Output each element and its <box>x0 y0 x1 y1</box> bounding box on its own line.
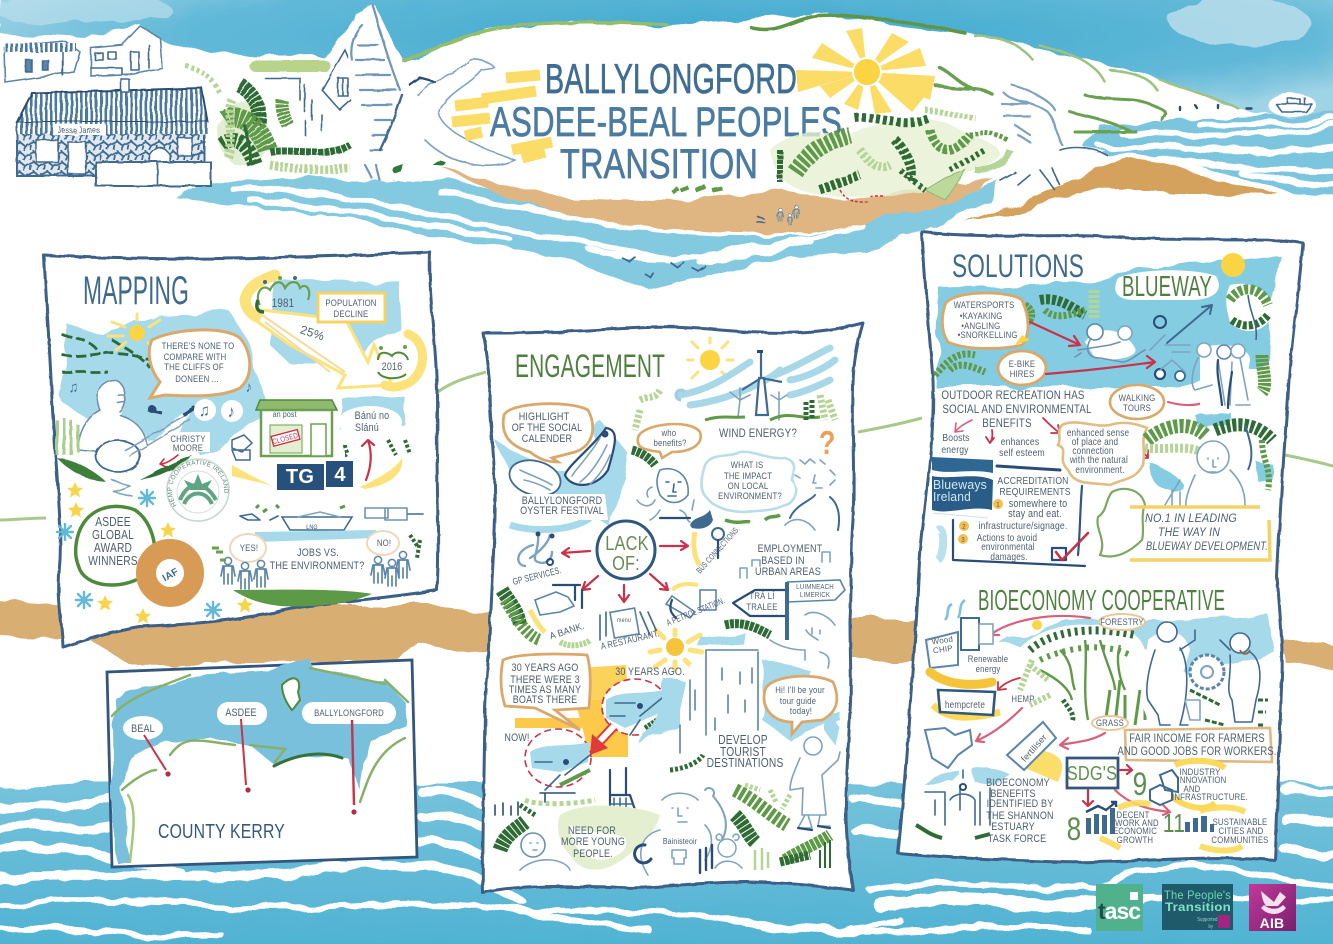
illustration: 30 years ago circle <box>602 666 685 735</box>
text: outdoor recreation benefits: OUTDOOR RECREATION HAS <box>941 389 1085 402</box>
box: accreditation requirements: ACCREDITATION <box>997 475 1069 487</box>
illustration: man among trees <box>1145 412 1273 507</box>
background: sky wash <box>0 0 1333 118</box>
goal 11: sustainable cities: COMMUNITIES <box>1211 834 1269 845</box>
text: outdoor recreation benefits: BENEFITS <box>982 417 1032 430</box>
box: accreditation requirements: damages. <box>990 551 1028 562</box>
label: Ballylongford Oyster Festival: BALLYLONGFORD <box>522 495 602 507</box>
logo: TG4: 4 <box>334 464 346 486</box>
panel: Solutions <box>898 232 1303 862</box>
logo: Blueways Ireland flag <box>932 457 993 560</box>
map: estuary water <box>112 660 408 860</box>
label: employment based in urban areas: BASED IN <box>761 555 805 567</box>
icon: wood chip and boiler <box>926 600 993 684</box>
pin: Beal <box>123 716 171 777</box>
box: accreditation requirements: infrastructure/signage. <box>979 520 1067 532</box>
pin: Beal: BEAL <box>131 723 155 735</box>
callout: enhanced sense of place: environment. <box>1075 464 1125 475</box>
label: boosts energy <box>941 432 970 456</box>
icon: GP services stethoscope <box>512 532 563 588</box>
icon: shirt <box>925 728 972 768</box>
logo: The People's Transition <box>1162 884 1233 930</box>
logo: AIB <box>1249 884 1296 931</box>
icon: tour guide woman <box>790 715 842 830</box>
icon: fertiliser bag: fertiliser <box>1019 732 1049 764</box>
icon: farmers with gear <box>1140 622 1268 725</box>
callout: tour guide greeting: today! <box>790 705 812 716</box>
icon: sun <box>1221 253 1245 277</box>
text: bioeconomy benefits: IDENTIFIED BY <box>987 798 1053 810</box>
callout: 30 years ago quote: THERE WERE 3 <box>510 674 580 686</box>
icon: children faces <box>520 833 742 870</box>
illustration: seabird and boat <box>622 85 1316 277</box>
icon: farmhouse left <box>4 41 80 82</box>
box: accreditation requirements: environmental <box>981 541 1035 552</box>
heading: Solutions: SOLUTIONS <box>952 248 1084 284</box>
icon: restaurant menu: menu <box>617 618 631 624</box>
icon: petrol station: A PETROL STATION. <box>665 595 726 628</box>
illustration: village fields and beach people <box>672 110 1010 225</box>
icon: woman asking <box>632 450 694 522</box>
label: hemp: HEMP <box>1011 693 1035 704</box>
callout: highlight of the social calendar <box>503 404 593 462</box>
icons: music notes: ♪ <box>246 379 252 395</box>
icon: Irish road sign: LUIMNEACH <box>796 584 834 591</box>
text: bioeconomy benefits: TASK FORCE <box>988 833 1046 845</box>
logo: Blueways Ireland flag: Blueways <box>933 478 987 492</box>
box: accreditation requirements: 1 <box>996 502 1000 509</box>
goal 9: industry innovation: INFRASTRUCTURE. <box>1172 791 1248 802</box>
icon: wood chip and boiler: Wood <box>931 635 954 647</box>
illustration: 30 years ago circle: 30 YEARS AGO. <box>615 666 685 678</box>
logo: The People's Transition: The People's <box>1164 888 1231 902</box>
illustration: foreground greenery <box>500 785 830 870</box>
box: accreditation requirements: stay and eat. <box>1008 508 1062 520</box>
panel: County Kerry map <box>107 660 417 867</box>
node: Lack of <box>597 521 655 579</box>
icon: man pointing with hat <box>725 612 835 668</box>
callout: walking tours: TOURS <box>1123 402 1151 413</box>
badge: IAF <box>146 549 194 597</box>
label: jobs vs the environment: THE ENVIRONMENT? <box>270 560 365 572</box>
goal 8: decent work: 8 <box>1067 813 1081 848</box>
group: Yes! protesters <box>212 534 268 589</box>
pin: Asdee: ASDEE <box>225 707 257 719</box>
callout: Asdee Global Award winners: ASDEE <box>95 516 131 529</box>
callout: watersports: •ANGLING <box>961 320 1000 331</box>
arrows: from Lack of to services <box>562 541 688 602</box>
callout: tour guide greeting <box>764 676 837 734</box>
callout: enhanced sense of place <box>1058 422 1147 485</box>
label: develop tourist destinations: DEVELOP <box>718 734 768 747</box>
illustration: town skyline and factory <box>495 768 635 815</box>
box: accreditation requirements: 2 <box>962 524 966 531</box>
decoration: stars and sparkles <box>57 482 253 624</box>
group: No! protesters: NO! <box>377 537 391 548</box>
callout: Asdee Global Award winners <box>76 506 155 585</box>
callout: number one in Blueway development: THE WAY IN <box>1158 527 1220 539</box>
wash: bioeconomy sky <box>998 614 1272 680</box>
text: bioeconomy benefits: ESTUARY <box>991 821 1035 833</box>
icon: dove bird <box>690 510 713 529</box>
heading: Blueway <box>1115 270 1219 303</box>
callout: watersports: •SNORKELLING <box>958 329 1018 340</box>
callout: enhanced sense of place: with the natural <box>1069 454 1128 465</box>
callout: fair income for farmers: AND GOOD JOBS FOR WORKERS. <box>1117 745 1277 758</box>
icon: bus stop connections <box>694 524 742 575</box>
group: No! protesters <box>367 531 420 586</box>
callout: Asdee Global Award winners: WINNERS <box>88 555 138 568</box>
icon: bank <box>502 585 590 645</box>
label: Bánú no Slánú <box>338 406 410 480</box>
callout: highlight of the social calendar: OF THE SOCIAL <box>512 422 582 434</box>
illustration: now circle: NOW! <box>504 732 530 744</box>
25 percent label: 25% <box>298 323 326 344</box>
logo: The People's Transition: by <box>1209 924 1214 929</box>
icon: bank: A BANK. <box>548 621 586 642</box>
label: Christy Moore: MOORE <box>173 442 203 453</box>
label: wind energy question <box>719 426 836 462</box>
box: accreditation requirements: somewhere to <box>1009 498 1068 510</box>
box: SDGs: SDG'S <box>1067 761 1117 784</box>
label: develop tourist destinations: TOURIST <box>720 746 766 759</box>
heading: Mapping: MAPPING <box>83 269 189 313</box>
icon: closed An Post office: an post <box>273 409 297 419</box>
goal 8: decent work: DECENT <box>1117 809 1150 820</box>
icon: hempcrete block: hempcrete <box>945 699 985 710</box>
node: Lack of: OF: <box>612 551 640 574</box>
goal 9: industry innovation: 9 <box>1133 768 1147 803</box>
label: employment based in urban areas <box>740 543 830 578</box>
icon: Carrigafoyle castle tower <box>640 633 840 770</box>
icon: Irish road sign: TRALEE <box>746 601 778 612</box>
background: green horizon dashes <box>0 372 1333 520</box>
callout: need for more young people: MORE YOUNG <box>561 836 625 848</box>
wash: Blueway water <box>935 257 1285 387</box>
label: renewable energy <box>968 653 1008 674</box>
callout: walking tours <box>1110 385 1164 419</box>
background: bottom water <box>0 760 1333 944</box>
goal 8: decent work: GROWTH <box>1117 834 1153 845</box>
callout: cliffs of Doneen quote <box>149 330 250 398</box>
arrows: to activities <box>1030 305 1217 405</box>
logo: TG4 <box>232 458 402 490</box>
callout: 30 years ago quote: 30 YEARS AGO <box>512 662 578 674</box>
group: Yes! protesters: YES! <box>240 542 258 553</box>
icon: kayaker <box>1075 324 1145 362</box>
illustration: swan <box>348 3 525 182</box>
callout: Asdee Global Award winners: GLOBAL <box>92 529 134 542</box>
goal 8: decent work <box>1067 802 1159 848</box>
population decline label <box>318 293 385 322</box>
heading: Engagement: ENGAGEMENT <box>515 348 665 384</box>
callout: who benefits: who <box>661 427 676 438</box>
panel: Mapping <box>42 250 440 648</box>
callout: enhanced sense of place: connection <box>1072 445 1114 456</box>
population decline label: DECLINE <box>334 308 368 319</box>
callout: tour guide greeting: tour guide <box>780 695 816 706</box>
callout: enhanced sense of place: enhanced sense <box>1067 427 1129 438</box>
title sun <box>452 28 935 158</box>
illustration: green bank and hedges <box>57 335 193 483</box>
callout: 30 years ago quote: TIMES AS MANY <box>509 684 581 696</box>
callout: number one in Blueway development: BLUEWAY DEVELOPMENT. <box>1146 541 1268 553</box>
wash: cliffs and singer background <box>60 312 268 455</box>
callout: watersports: WATERSPORTS <box>954 299 1014 310</box>
goal 9: industry innovation: INNOVATION <box>1178 774 1226 785</box>
callout: number one in Blueway development: NO.1 IN LEADING <box>1145 513 1237 525</box>
text: bioeconomy benefits: BIOECONOMY <box>986 777 1050 789</box>
icon: hempcrete block <box>933 678 1020 717</box>
callout: 30 years ago quote <box>501 654 628 757</box>
label: employment based in urban areas: EMPLOYMENT <box>758 543 822 555</box>
callout: watersports <box>942 293 1030 348</box>
goal 11: sustainable cities: SUSTAINABLE <box>1213 816 1267 827</box>
label: grass: GRASS <box>1096 717 1124 728</box>
badge: IAF: IAF <box>161 566 181 584</box>
icon: cottage with Jesse James sign: Jesse James <box>58 125 100 135</box>
arrows: benefit arrows <box>955 418 1148 458</box>
icon: restaurant menu: A RESTAURANT. <box>600 628 661 653</box>
illustration: tree and grass <box>1018 625 1146 725</box>
illustration: green hillside <box>233 590 372 606</box>
label: boosts energy: Boosts <box>942 432 970 444</box>
background: top estuary water <box>175 112 1333 290</box>
text: bioeconomy benefits <box>986 777 1054 845</box>
illustration: oyster wash and oysters <box>495 420 625 530</box>
goal 9: industry innovation <box>1133 761 1248 808</box>
callout: who benefits <box>638 424 701 458</box>
label: enhances self esteem: enhances <box>1001 436 1039 448</box>
1981 crown: 1981 <box>272 297 294 310</box>
box: accreditation requirements <box>953 466 1088 566</box>
box: accreditation requirements: 3 <box>961 537 965 544</box>
text: outdoor recreation benefits <box>941 389 1092 430</box>
callout: Asdee Global Award winners: AWARD <box>94 542 132 555</box>
logo: Blueways Ireland flag: Ireland <box>933 490 971 504</box>
infographic: population decline <box>245 275 423 388</box>
icon: Irish road sign: TRÁ LÍ <box>749 590 775 601</box>
callout: fair income for farmers: FAIR INCOME FOR FARMERS <box>1129 732 1265 745</box>
label: Christy Moore <box>160 432 210 467</box>
callout: E-bike hires: E-BIKE <box>1009 358 1035 369</box>
callout: need for more young people: PEOPLE. <box>573 848 613 860</box>
node: Lack of: LACK <box>605 531 649 554</box>
logo: The People's Transition: Transition <box>1165 902 1231 914</box>
callout: impact on local environment cloud: THE IMPACT <box>724 470 773 481</box>
main title <box>452 28 935 187</box>
callout: impact on local environment cloud: ON LOCAL <box>728 480 768 491</box>
label: grass <box>1060 716 1128 749</box>
callout: cliffs of Doneen quote: THERE'S NONE TO <box>162 340 234 351</box>
pin: Ballylongford: BALLYLONGFORD <box>314 707 384 718</box>
background: beach sand bands <box>0 158 1333 672</box>
icon: sun small <box>1032 620 1042 630</box>
goal 11: sustainable cities: 11 <box>1163 809 1185 839</box>
scene: coastline top edge <box>255 15 1251 132</box>
icons: music notes <box>69 379 252 422</box>
icon: house behind <box>91 26 162 76</box>
label: jobs vs the environment <box>255 530 378 572</box>
box: SDGs <box>1067 758 1170 815</box>
pin: Ballylongford <box>302 702 396 815</box>
icon: petrol station <box>665 584 726 628</box>
callout: impact on local environment cloud: ENVIRONMENT? <box>718 490 782 501</box>
title line 2: ASDEE-BEAL PEOPLES <box>490 98 842 145</box>
icons: music notes: ♪ <box>228 403 235 421</box>
label: forestry: FORESTRY <box>1100 616 1144 627</box>
label: wind energy question: ? <box>819 426 836 462</box>
callout: number one in Blueway development <box>1130 507 1270 560</box>
logo: The People's Transition: Supported <box>1197 917 1218 922</box>
label: wind energy question: WIND ENERGY? <box>719 427 797 440</box>
text: bioeconomy benefits: THE SHANNON <box>986 810 1054 822</box>
box: accreditation requirements: Actions to avoid <box>977 532 1037 543</box>
icon: sun behind castle <box>650 630 702 670</box>
label: Bánú no Slánú: Bánú no <box>355 410 390 422</box>
goal 9: industry innovation: AND <box>1184 783 1200 794</box>
icon: Christy Moore singing with guitar <box>75 380 195 496</box>
pin: Asdee <box>217 702 267 793</box>
2016 crown: 2016 <box>382 361 403 373</box>
map: Ireland <box>1098 489 1145 557</box>
label: Bánú no Slánú: Slánú <box>355 422 379 434</box>
illustration: LNG ship <box>240 505 423 531</box>
callout: who benefits: benefits? <box>653 437 687 448</box>
callout: tour guide greeting: Hi! I'll be your <box>775 684 825 695</box>
1981 crown <box>257 276 309 312</box>
icon: curly-haired man <box>725 459 839 530</box>
goal 8: decent work: WORK AND <box>1115 817 1159 828</box>
icon: small sun <box>108 314 160 350</box>
icon: cottage with Jesse James sign <box>17 79 211 186</box>
label: renewable energy: energy <box>976 663 1001 674</box>
illustration: trees and churchyard <box>185 50 442 170</box>
icon: town hall building <box>916 768 1010 838</box>
label: boosts energy: energy <box>941 444 969 456</box>
goal 9: industry innovation: INDUSTRY <box>1180 766 1220 777</box>
label: Ballylongford Oyster Festival: OYSTER FESTIVAL <box>520 505 604 517</box>
icon: closed An Post office <box>232 397 405 460</box>
logo: Hemp Cooperative Ireland badge: HEMP COOPERATIVE IRELAND <box>168 460 228 508</box>
text: bioeconomy benefits: BENEFITS <box>990 788 1036 800</box>
label: develop tourist destinations: DESTINATIONS <box>707 757 784 770</box>
map: coastline and island <box>112 668 408 862</box>
box: accreditation requirements: REQUIREMENTS <box>999 486 1071 498</box>
goal 11: sustainable cities <box>1163 807 1269 850</box>
callout: impact on local environment cloud <box>701 452 796 512</box>
illustration: LNG ship: LNG <box>306 525 318 531</box>
panel: Engagement <box>483 323 863 893</box>
callout: E-bike hires: HIRES <box>1010 368 1034 379</box>
title line 1: BALLYLONGFORD <box>545 55 797 102</box>
icon: young hurler: Bainisteoir <box>663 836 697 846</box>
population decline label: POPULATION <box>325 297 377 308</box>
icon: restaurant menu <box>600 608 661 653</box>
callout: highlight of the social calendar: CALENDER <box>522 433 572 445</box>
text: outdoor recreation benefits: SOCIAL AND ENVIRONMENTAL <box>942 403 1092 416</box>
illustration: trees around water <box>935 284 1272 392</box>
label: jobs vs the environment: JOBS VS. <box>297 547 339 559</box>
callout: impact on local environment cloud: WHAT IS <box>731 459 763 470</box>
goal 11: sustainable cities: CITIES AND <box>1219 825 1263 836</box>
label: forestry <box>990 614 1145 635</box>
callout: E-bike hires <box>998 351 1046 385</box>
label: renewable energy: Renewable <box>968 653 1008 664</box>
2016 crown <box>376 334 423 387</box>
goal 8: decent work: ECONOMIC <box>1113 825 1157 836</box>
callout: cliffs of Doneen quote: DONEEN ... <box>175 373 219 384</box>
callout: need for more young people <box>558 806 660 870</box>
logo: TG4: TG <box>286 466 314 488</box>
label: Ballylongford Oyster Festival <box>512 494 608 520</box>
icon: bus stop connections: BUS CONNECTIONS. <box>694 524 742 575</box>
icon: family group <box>1192 343 1250 410</box>
arrow: from then to now <box>590 726 614 755</box>
label: hemp <box>976 693 1035 742</box>
logo: tasc <box>1096 884 1143 931</box>
icon: closed An Post office: CLOSED <box>272 432 299 446</box>
icon: wind turbines and wind swirls <box>635 348 835 430</box>
logo: AIB: AIB <box>1260 915 1284 931</box>
illustration: now circle <box>504 729 591 790</box>
callout: need for more young people: NEED FOR <box>568 825 616 837</box>
callout: cliffs of Doneen quote: COMPARE WITH <box>164 351 226 362</box>
icon: Irish road sign: LIMERICK <box>800 592 830 599</box>
callout: 30 years ago quote: BOATS THERE <box>513 694 577 706</box>
label: employment based in urban areas: URBAN AREAS <box>755 566 821 578</box>
logo: tasc: tasc <box>1098 898 1141 924</box>
label: develop tourist destinations <box>705 732 784 770</box>
icons: music notes: ♫ <box>69 379 78 395</box>
icons: music notes: ♫ <box>199 402 210 420</box>
icon: sun <box>688 338 733 378</box>
icon: fertiliser bag <box>1007 722 1062 782</box>
icon: Irish road sign <box>733 580 845 640</box>
label: Christy Moore: CHRISTY <box>170 433 206 444</box>
callout: walking tours: WALKING <box>1119 392 1155 403</box>
callout: fair income for farmers <box>1117 728 1277 762</box>
callout: watersports: •KAYAKING <box>960 310 1003 321</box>
callout: highlight of the social calendar: HIGHLIGHT <box>519 411 569 423</box>
title line 3: TRANSITION <box>560 140 758 187</box>
icon: wood chip and boiler: CHIP <box>932 644 953 655</box>
label: enhances self esteem: self esteem <box>999 447 1045 459</box>
heading: County Kerry: COUNTY KERRY <box>158 821 285 843</box>
icon: young hurler <box>635 788 726 875</box>
heading: Blueway: BLUEWAY <box>1122 271 1212 303</box>
callout: cliffs of Doneen quote: THE CLIFFS OF <box>164 361 224 372</box>
icon: GP services stethoscope: GP SERVICES. <box>512 565 563 588</box>
callout: enhanced sense of place: of place and <box>1072 436 1118 447</box>
icon: e-bike <box>1150 316 1190 381</box>
label: enhances self esteem <box>999 436 1045 459</box>
